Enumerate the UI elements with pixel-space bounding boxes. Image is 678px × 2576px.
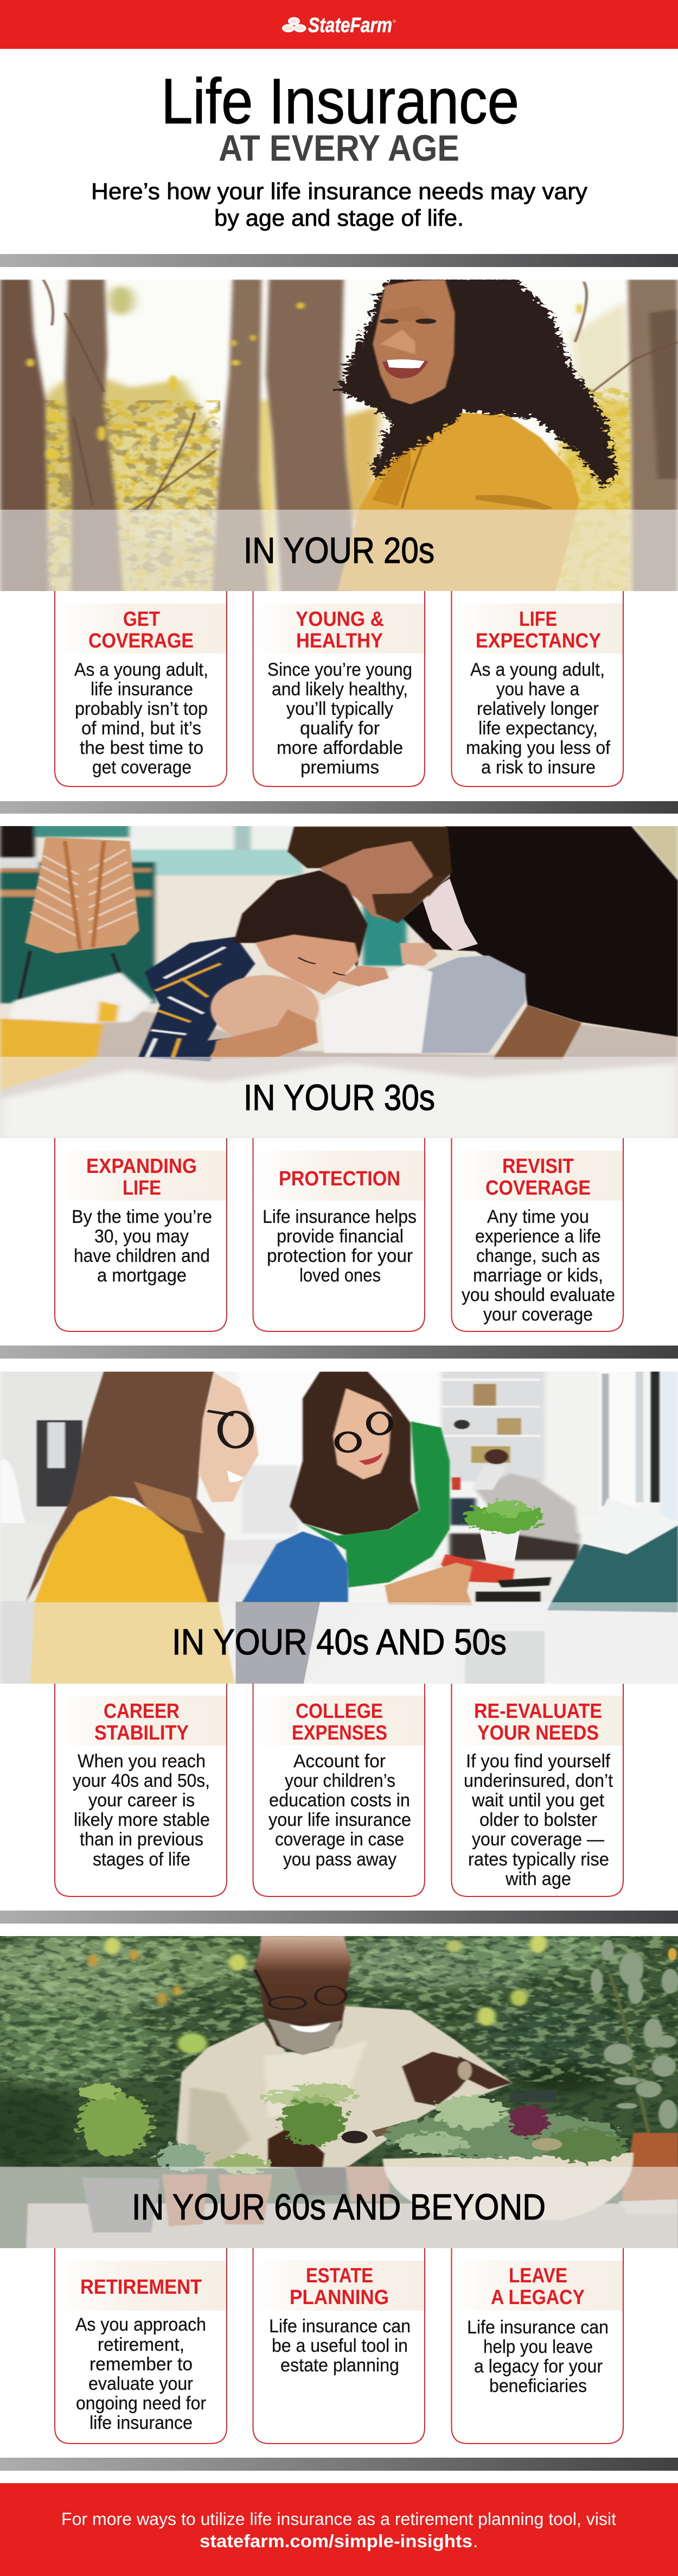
card: revisit coverage: Any time you (487, 1207, 589, 1227)
card: life expectancy (451, 591, 623, 786)
left woman's face (199, 1373, 259, 1502)
baby head (210, 975, 319, 1059)
heading band (0, 1602, 678, 1684)
middle fern (264, 2083, 355, 2146)
card: protection: protection for your (267, 1246, 413, 1266)
card: get coverage: probably isn’t top (75, 699, 208, 719)
card: career stability (55, 1684, 227, 1896)
card: re-evaluate your needs: older to bolster (479, 1810, 597, 1830)
subtitle (91, 179, 588, 231)
photo: two women at a laptop (0, 1357, 678, 1688)
card: life expectancy: EXPECTANCY (476, 630, 601, 652)
photo: older man gardening (0, 1911, 678, 2258)
succulent bowl (383, 2089, 634, 2220)
card: expanding life: a mortgage (97, 1265, 187, 1286)
card: expanding life: 30, you may (94, 1226, 189, 1247)
laptop (303, 1498, 678, 1688)
right woman's top (303, 1422, 450, 1588)
card: career stability: your career is (88, 1790, 195, 1811)
card: protection: Life insurance helps (263, 1207, 417, 1227)
card: get coverage (55, 591, 227, 786)
card: young and healthy (253, 591, 425, 786)
subtitle: Here’s how your life insurance needs may vary (91, 179, 588, 205)
panel: in your 20s (0, 271, 678, 786)
card: college expenses: education costs in (269, 1790, 410, 1811)
card: leave a legacy: A LEGACY (491, 2286, 585, 2309)
card: retirement: As you approach (75, 2314, 206, 2335)
card: protection: loved ones (299, 1265, 381, 1286)
card: young and healthy: qualify for (300, 718, 380, 739)
heading band (0, 1057, 678, 1138)
logo: State Farm: ® (393, 19, 396, 24)
head (253, 1936, 351, 2055)
foreground blanket (0, 1063, 678, 1140)
card: career stability: When you reach (78, 1751, 206, 1772)
logo: State Farm (283, 14, 396, 37)
hair (335, 276, 612, 487)
card: get coverage: get coverage (92, 757, 191, 778)
card: revisit coverage (451, 1138, 623, 1331)
panel: in your 30s (0, 814, 678, 1331)
card: college expenses: EXPENSES (292, 1722, 387, 1744)
card: estate planning: ESTATE (306, 2264, 373, 2287)
card: protection (253, 1138, 425, 1331)
card: get coverage: COVERAGE (88, 630, 194, 652)
card: college expenses: you pass away (283, 1849, 396, 1870)
heading band (0, 510, 678, 591)
card: revisit coverage: experience a life (475, 1226, 601, 1247)
card: protection: PROTECTION (279, 1168, 400, 1190)
divider bar 3 (0, 1346, 678, 1359)
card: life expectancy: LIFE (519, 608, 557, 631)
card: young and healthy: and likely healthy, (272, 679, 408, 700)
card: college expenses: your life insurance (268, 1810, 411, 1830)
divider bar 5 (0, 2458, 678, 2471)
card: re-evaluate your needs (451, 1684, 623, 1896)
card: young and healthy: you’ll typically (286, 699, 393, 719)
card: get coverage: of mind, but it’s (81, 718, 201, 739)
baby body (320, 943, 526, 1053)
logo: State Farm: StateFarm (308, 14, 392, 37)
footer: . (473, 2531, 478, 2551)
card: retirement: retirement, (98, 2334, 184, 2355)
face (373, 280, 455, 404)
card: retirement: ongoing need for (76, 2393, 206, 2414)
card: re-evaluate your needs: rates typically rise (468, 1849, 609, 1870)
card: young and healthy: premiums (300, 757, 379, 778)
card: revisit coverage: REVISIT (502, 1155, 574, 1178)
bed sheets (0, 971, 678, 1099)
card: estate planning: Life insurance can (269, 2316, 411, 2337)
card: college expenses: your children’s (285, 1771, 395, 1791)
heading band: IN YOUR 30s (244, 1077, 435, 1118)
card: career stability: your 40s and 50s, (73, 1771, 210, 1791)
card: young and healthy: more affordable (277, 738, 403, 758)
card: estate planning: estate planning (280, 2355, 399, 2376)
card: life expectancy: As a young adult, (470, 659, 605, 680)
photo: father with two children on a bed (0, 814, 678, 1140)
shelf items (0, 1369, 660, 1523)
card: leave a legacy: beneficiaries (489, 2376, 587, 2396)
divider bar 1 (0, 254, 678, 267)
card: retirement (55, 2248, 227, 2444)
card: estate planning: PLANNING (290, 2286, 389, 2309)
hands (268, 2052, 513, 2169)
man's clothing (402, 826, 678, 1037)
collar (395, 394, 450, 435)
card: life expectancy: a risk to insure (481, 757, 596, 778)
footer: For more ways to utilize life insurance as a retirement planning tool, visit (61, 2509, 616, 2529)
hand (385, 1563, 474, 1616)
pots and table (0, 2166, 678, 2258)
card: young and healthy: YOUNG & (296, 608, 384, 631)
jeans (242, 1531, 348, 1602)
heading band: IN YOUR 60s AND BEYOND (132, 2187, 546, 2228)
shirt (176, 2006, 513, 2168)
card: re-evaluate your needs: underinsured, don’t (464, 1771, 613, 1791)
right woman's face (333, 1388, 391, 1480)
card: life expectancy: life expectancy, (478, 718, 598, 739)
card: life expectancy: relatively longer (477, 699, 599, 719)
card: career stability: than in previous (80, 1829, 203, 1850)
card: revisit coverage: you should evaluate (462, 1285, 615, 1305)
card: career stability: likely more stable (74, 1810, 210, 1830)
card: college expenses: COLLEGE (296, 1700, 383, 1723)
title (161, 66, 519, 169)
card: estate planning: be a useful tool in (272, 2336, 408, 2356)
divider bar 2 (0, 801, 678, 814)
child's striped top (138, 937, 255, 1061)
card: retirement: evaluate your (88, 2374, 193, 2394)
card: re-evaluate your needs: RE-EVALUATE (474, 1700, 602, 1723)
man's arm (493, 1005, 581, 1059)
card: college expenses: coverage in case (275, 1829, 404, 1850)
left woman's sweater (30, 1496, 235, 1688)
card: career stability: stages of life (93, 1849, 190, 1870)
card: expanding life: LIFE (123, 1177, 161, 1200)
man's head (287, 827, 452, 923)
card: retirement: life insurance (89, 2413, 193, 2433)
card: get coverage: As a young adult, (74, 659, 208, 680)
card: retirement: remember to (89, 2354, 193, 2375)
card: young and healthy: Since you’re young (267, 659, 412, 680)
card: protection: provide financial (277, 1226, 404, 1247)
subtitle: by age and stage of life. (214, 205, 464, 231)
card: leave a legacy: LEAVE (509, 2264, 567, 2287)
card: retirement: RETIREMENT (80, 2276, 202, 2299)
card: life expectancy: you have a (496, 679, 579, 700)
card: get coverage: GET (123, 608, 160, 631)
card: revisit coverage: your coverage (483, 1304, 593, 1325)
card: re-evaluate your needs: If you find yourself (466, 1751, 611, 1772)
card: re-evaluate your needs: with age (505, 1869, 571, 1889)
heading band: IN YOUR 40s AND 50s (172, 1622, 507, 1663)
card: leave a legacy (451, 2248, 623, 2444)
card: leave a legacy: help you leave (483, 2337, 593, 2357)
card: expanding life: have children and (74, 1246, 210, 1266)
card: college expenses (253, 1684, 425, 1896)
card: revisit coverage: COVERAGE (485, 1177, 591, 1200)
footer (0, 2483, 678, 2576)
card: expanding life (55, 1138, 227, 1331)
foliage (0, 1931, 627, 2170)
card: career stability: STABILITY (94, 1722, 189, 1744)
card: revisit coverage: change, such as (476, 1246, 600, 1266)
child's head (233, 870, 368, 995)
card: expanding life: EXPANDING (86, 1155, 197, 1178)
card: college expenses: Account for (293, 1751, 386, 1772)
card: leave a legacy: Life insurance can (467, 2317, 609, 2338)
card: estate planning (253, 2248, 425, 2444)
card: get coverage: the best time to (80, 738, 203, 758)
photo: young woman in yellow jacket among trees (0, 271, 678, 597)
heading band (0, 2167, 678, 2248)
card: re-evaluate your needs: your coverage — (472, 1829, 604, 1850)
foliage texture (39, 388, 631, 597)
jacket (337, 413, 579, 591)
footer: statefarm.com/simple-insights (200, 2531, 472, 2551)
card: re-evaluate your needs: wait until you get (471, 1790, 605, 1811)
wicker chair (20, 837, 139, 999)
card: expanding life: By the time you’re (72, 1207, 212, 1227)
leaf texture (0, 1936, 678, 2169)
left woman's hair (26, 1372, 225, 1602)
card: life expectancy: making you less of (466, 738, 611, 758)
panel: in your 40s and 50s (0, 1357, 678, 1896)
card: get coverage: life insurance (91, 679, 193, 700)
trowel (372, 2120, 419, 2137)
heading band: IN YOUR 20s (244, 530, 434, 571)
left fern (78, 2083, 268, 2173)
title: Life Insurance (161, 66, 519, 137)
right plant (591, 1940, 678, 2201)
card: career stability: CAREER (104, 1700, 180, 1723)
card: young and healthy: HEALTHY (296, 630, 383, 652)
card: leave a legacy: a legacy for your (474, 2356, 603, 2377)
card: re-evaluate your needs: YOUR NEEDS (477, 1722, 599, 1744)
title: AT EVERY AGE (219, 128, 459, 169)
header bar (0, 0, 678, 49)
card: revisit coverage: marriage or kids, (473, 1265, 603, 1286)
divider bar 4 (0, 1911, 678, 1924)
right woman's hair (290, 1372, 419, 1536)
plant and pot (465, 1501, 542, 1562)
panel: in your 60s and beyond (0, 1911, 678, 2444)
